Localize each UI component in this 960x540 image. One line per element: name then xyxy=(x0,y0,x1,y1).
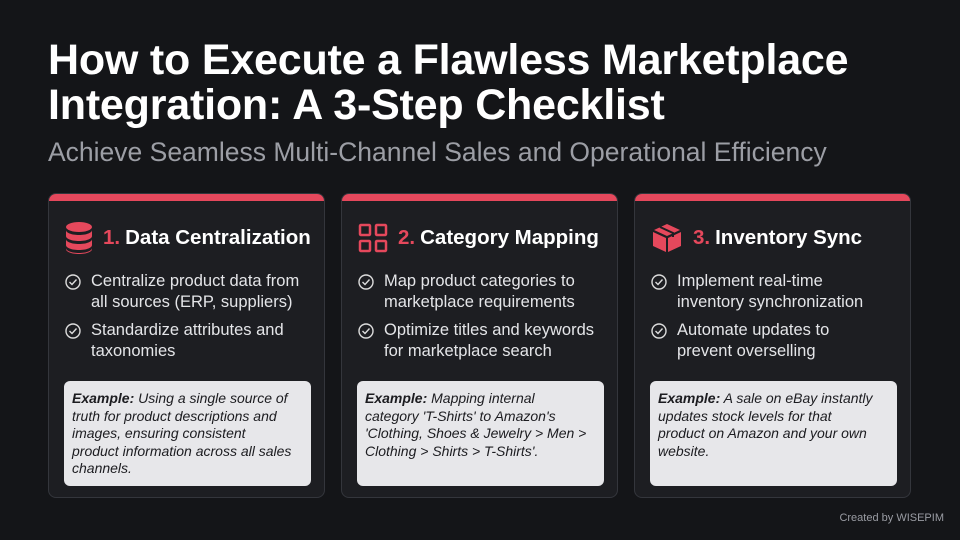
checklist: Map product categories to xyxy=(384,272,575,290)
title: How to Execute a Flawless Marketplace xyxy=(48,36,848,84)
heading: step 2 xyxy=(358,224,599,252)
panel: data centralization xyxy=(48,193,325,498)
example box: 'Clothing, Shoes & Jewelry > Men > xyxy=(365,425,586,441)
checklist: Automate updates to xyxy=(677,321,829,339)
checklist: Optimize titles and keywords xyxy=(384,321,594,339)
checklist: Centralize product data from xyxy=(91,272,299,290)
example box xyxy=(64,381,311,486)
title: Integration: A 3-Step Checklist xyxy=(48,81,665,129)
checklist xyxy=(65,272,299,360)
checklist xyxy=(651,272,863,360)
example box: images, ensuring consistent xyxy=(72,425,246,441)
heading: step 3 xyxy=(653,224,862,252)
example box: channels. xyxy=(72,460,132,476)
heading: step 1: Data Centralization xyxy=(125,226,311,249)
example box: Example: A sale on eBay instantly xyxy=(658,390,873,406)
title xyxy=(48,36,848,129)
checklist: Standardize attributes and xyxy=(91,321,284,339)
checklist xyxy=(358,272,594,360)
panel: category mapping xyxy=(341,193,618,498)
heading: step 1 xyxy=(66,222,311,254)
checklist: taxonomies xyxy=(91,342,175,360)
example box: category 'T-Shirts' to Amazon's xyxy=(365,408,556,424)
checklist: for marketplace search xyxy=(384,342,552,360)
checklist: inventory synchronization xyxy=(677,293,863,311)
heading: step 3: 3. xyxy=(693,226,710,249)
heading: step 2: Category Mapping xyxy=(420,226,599,249)
example box: website. xyxy=(658,442,709,458)
heading: step 1: 1. xyxy=(103,226,120,249)
checklist: marketplace requirements xyxy=(384,293,575,311)
example box: Clothing > Shirts > T-Shirts'. xyxy=(365,442,538,458)
example box: Example: Mapping internal xyxy=(365,390,535,406)
credit: Created by WISEPIM xyxy=(839,512,944,524)
example box xyxy=(650,381,897,486)
panel: inventory sync xyxy=(634,193,911,498)
checklist: prevent overselling xyxy=(677,342,816,360)
heading: step 2: 2. xyxy=(398,226,415,249)
heading: step 3: Inventory Sync xyxy=(715,226,862,249)
example box: product on Amazon and your own xyxy=(658,425,867,441)
checklist: Implement real-time xyxy=(677,272,823,290)
example box: truth for product descriptions and xyxy=(72,408,277,424)
subtitle: Achieve Seamless Multi-Channel Sales and Operational Efficiency xyxy=(48,137,827,167)
checklist: all sources (ERP, suppliers) xyxy=(91,293,292,311)
example box: product information across all sales xyxy=(72,442,291,458)
example box: updates stock levels for that xyxy=(658,408,832,424)
example box: Example: Using a single source of xyxy=(72,390,288,406)
example box xyxy=(357,381,604,486)
